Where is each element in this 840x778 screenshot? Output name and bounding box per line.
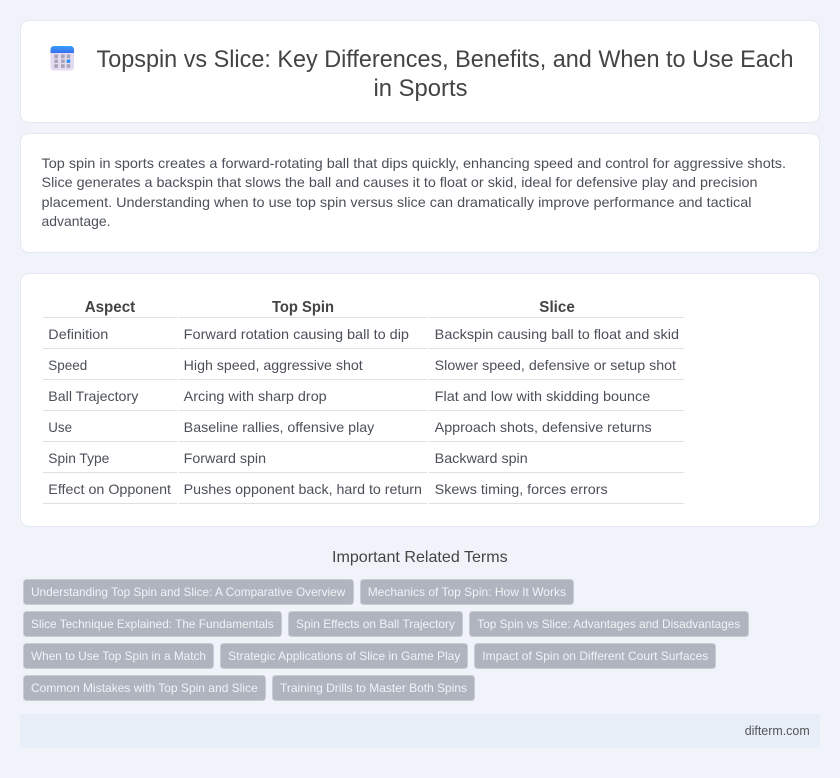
tag: strategic applications bbox=[220, 644, 468, 668]
table row: spin type bbox=[43, 450, 684, 473]
table row: ball trajectory: Ball Trajectory bbox=[48, 388, 138, 404]
panel: description bbox=[20, 134, 820, 252]
panel: related term tags bbox=[24, 580, 748, 700]
table row: use: Approach shots, defensive returns bbox=[435, 419, 652, 435]
text block: description paragraph: advantage. bbox=[42, 213, 110, 229]
text block: description paragraph bbox=[42, 155, 786, 229]
footer: difterm.com bbox=[745, 723, 810, 738]
table row: speed: Speed bbox=[48, 357, 87, 373]
table row: use: Baseline rallies, offensive play bbox=[184, 419, 374, 435]
table row: effect on opponent: Effect on Opponent bbox=[48, 481, 171, 497]
table row: definition: Definition bbox=[48, 326, 108, 342]
tag: mechanics: Mechanics of Top Spin: How It Works bbox=[368, 585, 566, 599]
title: Topspin vs Slice: Key Differences, Benefits, and When to Use Each bbox=[96, 46, 794, 73]
tag: slice technique bbox=[24, 612, 282, 636]
table row: ball trajectory: Flat and low with skidding bounce bbox=[435, 388, 651, 404]
table row: use bbox=[43, 419, 684, 442]
tag: when to use: When to Use Top Spin in a Match bbox=[31, 649, 206, 663]
table row: effect on opponent bbox=[43, 481, 684, 504]
tag: court surfaces bbox=[474, 644, 716, 668]
tag: training drills bbox=[272, 676, 474, 700]
table row: spin type: Spin Type bbox=[48, 450, 110, 466]
table row: speed: High speed, aggressive shot bbox=[184, 357, 363, 373]
table row: definition: Forward rotation causing ball to dip bbox=[184, 326, 409, 342]
tag: when to use bbox=[24, 644, 214, 668]
tag: understanding bbox=[24, 580, 354, 604]
table header row bbox=[43, 299, 684, 318]
table row: definition bbox=[43, 326, 684, 349]
table header row: Aspect bbox=[85, 299, 136, 316]
tag: advantages bbox=[470, 612, 748, 636]
panel: comparison table bbox=[20, 274, 820, 526]
table row: ball trajectory bbox=[43, 388, 684, 411]
table row: spin type: Forward spin bbox=[184, 450, 266, 466]
text block: description paragraph: placement. Understanding when to use top spin versus slice can dramatically improve performance and tactical bbox=[42, 194, 751, 210]
tag: court surfaces: Impact of Spin on Different Court Surfaces bbox=[482, 649, 708, 663]
table row: ball trajectory: Arcing with sharp drop bbox=[184, 388, 327, 404]
heading: important related terms: Important Related Terms bbox=[332, 549, 508, 566]
table row: definition: Backspin causing ball to float and skid bbox=[435, 326, 679, 342]
tag: spin effects: Spin Effects on Ball Trajectory bbox=[296, 617, 455, 631]
table row: use: Use bbox=[48, 419, 72, 435]
footer bbox=[20, 714, 820, 748]
table row: effect on opponent: Skews timing, forces errors bbox=[435, 481, 608, 497]
title bbox=[96, 46, 794, 102]
tag: advantages: Top Spin vs Slice: Advantages and Disadvantages bbox=[477, 617, 740, 631]
text block: description paragraph: Top spin in sports creates a forward-rotating ball that dips quickly, enhancing speed and control for aggressive shots. bbox=[42, 155, 786, 171]
table row: spin type: Backward spin bbox=[435, 450, 528, 466]
tag: common mistakes: Common Mistakes with Top Spin and Slice bbox=[31, 681, 258, 695]
title: in Sports bbox=[374, 75, 468, 102]
tag: spin effects bbox=[288, 612, 462, 636]
tag: training drills: Training Drills to Master Both Spins bbox=[280, 681, 467, 695]
tag: mechanics bbox=[360, 580, 574, 604]
panel: header bbox=[20, 20, 820, 122]
table row: effect on opponent: Pushes opponent back, hard to return bbox=[184, 481, 422, 497]
table row: speed: Slower speed, defensive or setup shot bbox=[435, 357, 676, 373]
tag: strategic applications: Strategic Applications of Slice in Game Play bbox=[228, 649, 460, 663]
tag: understanding: Understanding Top Spin and Slice: A Comparative Overview bbox=[31, 585, 346, 599]
tag: slice technique: Slice Technique Explained: The Fundamentals bbox=[31, 617, 274, 631]
table row: speed bbox=[43, 357, 684, 380]
table header row: Slice bbox=[539, 299, 575, 316]
icon: calendar bbox=[50, 46, 74, 70]
table header row: Top Spin bbox=[272, 299, 334, 316]
tag: common mistakes bbox=[24, 676, 266, 700]
text block: description paragraph: Slice generates a backspin that slows the ball and causes it to float or skid, ideal for defensive play and precision bbox=[42, 174, 758, 190]
